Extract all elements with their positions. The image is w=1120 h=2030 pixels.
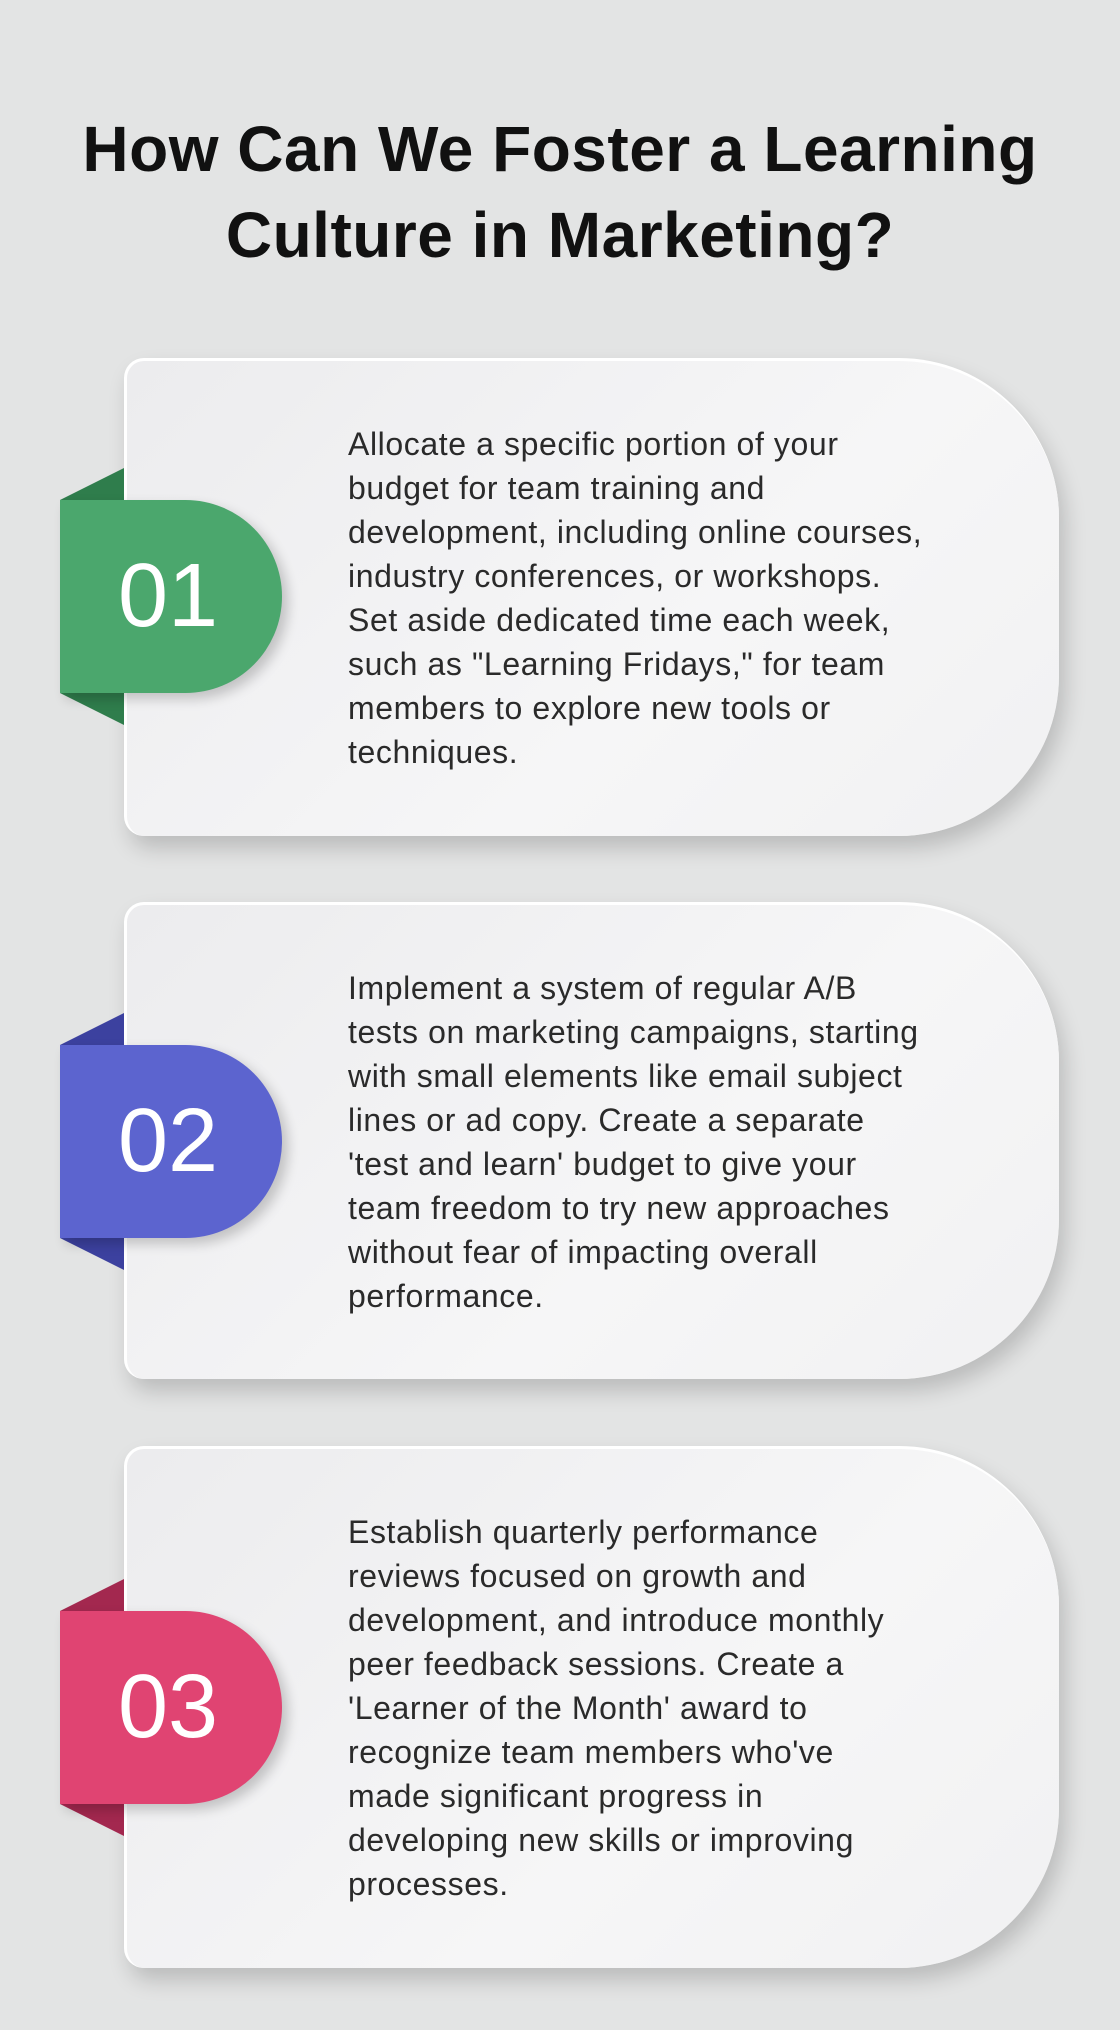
text: card 3 <box>348 1514 884 1902</box>
text: card 1: members to explore new tools or <box>348 690 831 726</box>
text: card 2: Implement a system of regular A/B <box>348 970 857 1006</box>
number tab <box>60 1611 282 1804</box>
fold top <box>60 1013 124 1045</box>
number tab <box>60 1045 282 1238</box>
panel: card 1 <box>124 358 1059 836</box>
text: card 1: techniques. <box>348 734 518 770</box>
fold bottom <box>60 693 124 725</box>
text: card 1: development, including online courses, <box>348 514 922 550</box>
text: card 1: industry conferences, or workshops. <box>348 558 881 594</box>
number tab: 03 <box>118 1657 218 1757</box>
text: card 3: Establish quarterly performance <box>348 1514 818 1550</box>
badge: 02 <box>60 1013 294 1270</box>
fold bottom <box>60 1238 124 1270</box>
panel: card 3 <box>124 1446 1059 1968</box>
text: card 1 <box>348 426 922 770</box>
text: card 3: recognize team members who've <box>348 1734 834 1770</box>
title: How Can We Foster a Learning <box>82 113 1038 185</box>
text: card 2: without fear of impacting overall <box>348 1234 818 1270</box>
number tab <box>60 500 282 693</box>
badge: 01 <box>60 468 294 725</box>
text: card 2: tests on marketing campaigns, starting <box>348 1014 919 1050</box>
panel: card 2 <box>124 902 1059 1379</box>
text: card 2: 'test and learn' budget to give your <box>348 1146 857 1182</box>
fold top <box>60 1579 124 1611</box>
title: Culture in Marketing? <box>226 199 894 271</box>
text: card 1: budget for team training and <box>348 470 765 506</box>
text: card 1: Set aside dedicated time each week, <box>348 602 890 638</box>
title <box>82 113 1038 271</box>
text: card 3: 'Learner of the Month' award to <box>348 1690 808 1726</box>
fold top <box>60 468 124 500</box>
text: card 1: Allocate a specific portion of your <box>348 426 839 462</box>
text: card 3: processes. <box>348 1866 509 1902</box>
text: card 3: peer feedback sessions. Create a <box>348 1646 844 1682</box>
text: card 2: performance. <box>348 1278 544 1314</box>
text: card 2 <box>348 970 919 1314</box>
text: card 3: reviews focused on growth and <box>348 1558 807 1594</box>
text: card 3: developing new skills or improving <box>348 1822 854 1858</box>
text: card 2: with small elements like email subject <box>348 1058 903 1094</box>
number tab: 02 <box>118 1091 218 1191</box>
text: card 1: such as "Learning Fridays," for team <box>348 646 885 682</box>
fold bottom <box>60 1804 124 1836</box>
text: card 2: lines or ad copy. Create a separate <box>348 1102 865 1138</box>
text: card 3: made significant progress in <box>348 1778 763 1814</box>
text: card 3: development, and introduce monthly <box>348 1602 884 1638</box>
number tab: 01 <box>118 546 218 646</box>
text: card 2: team freedom to try new approaches <box>348 1190 890 1226</box>
badge: 03 <box>60 1579 294 1836</box>
